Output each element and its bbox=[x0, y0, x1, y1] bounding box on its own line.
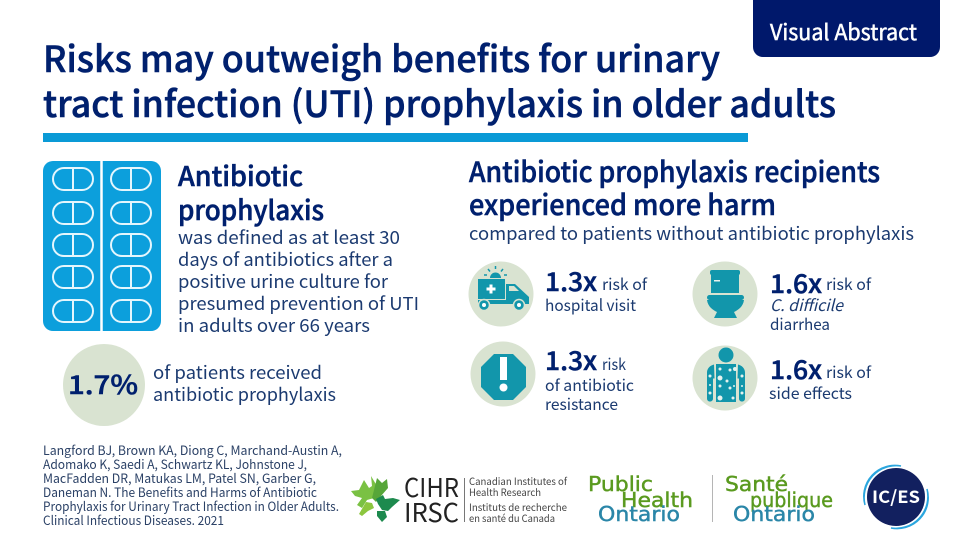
logo: CIHR IRSC: Canadian Institutes of bbox=[469, 473, 568, 488]
badge: Visual Abstract: Visual Abstract bbox=[770, 15, 917, 47]
logo: CIHR IRSC: Instituts de recherche bbox=[469, 499, 567, 514]
logo: IC/ES: IC/ES bbox=[872, 483, 920, 508]
citation text: Prophylaxis for Urinary Tract Infection in Older Adults. bbox=[43, 496, 339, 515]
icon: maple leaf bbox=[351, 476, 400, 522]
logo: CIHR IRSC bbox=[351, 468, 568, 530]
panel: antibiotic prophylaxis definition bbox=[43, 155, 419, 338]
callout: 1.7% of patients bbox=[63, 344, 336, 426]
callout: 1.7% of patients: 1.7% bbox=[68, 365, 138, 402]
logo: Public Health Ontario: Ontario bbox=[598, 502, 680, 526]
logo: CIHR IRSC: en santé du Canada bbox=[469, 510, 555, 525]
heading: antibiotic prophylaxis: prophylaxis bbox=[178, 189, 324, 228]
definition text bbox=[178, 224, 419, 338]
stat: hospital visit: risk of bbox=[602, 271, 648, 295]
stat: hospital visit bbox=[468, 262, 648, 326]
stat: antibiotic resistance: 1.3x bbox=[545, 341, 597, 378]
logo: CIHR IRSC: Health Research bbox=[469, 484, 541, 499]
title: tract infection (UTI) prophylaxis in older adults bbox=[43, 76, 836, 128]
logo: Public Health Ontario: Santé bbox=[725, 472, 788, 496]
stat: hospital visit: 1.3x bbox=[545, 262, 597, 299]
logo: Public Health Ontario: Public bbox=[588, 472, 653, 496]
stat: antibiotic resistance: of antibiotic bbox=[545, 372, 634, 396]
callout: 1.7% of patients: antibiotic prophylaxis bbox=[153, 381, 336, 407]
heading: antibiotic prophylaxis bbox=[178, 155, 324, 228]
title bbox=[43, 31, 836, 128]
icon: warning octagon bbox=[481, 354, 526, 400]
logo: Public Health Ontario: Ontario bbox=[733, 502, 815, 526]
title: Risks may outweigh benefits for urinary bbox=[43, 31, 720, 83]
logo: CIHR IRSC: IRSC bbox=[404, 493, 459, 530]
definition text: days of antibiotics after a bbox=[178, 246, 393, 272]
stat: C. difficile diarrhea: diarrhea bbox=[770, 311, 830, 335]
heading: recipients experienced more harm: Antibiotic prophylaxis recipients bbox=[469, 151, 880, 191]
citation text: Clinical Infectious Diseases. 2021 bbox=[43, 510, 224, 529]
definition text: presumed prevention of UTI bbox=[178, 290, 419, 316]
heading: recipients experienced more harm: compared to patients without antibiotic prophylaxis bbox=[469, 220, 914, 246]
stat: C. difficile diarrhea bbox=[692, 262, 872, 335]
heading: recipients experienced more harm: experienced more harm bbox=[469, 184, 776, 224]
logo: Public Health Ontario: publique bbox=[750, 488, 833, 512]
stat: side effects: 1.6x bbox=[770, 350, 822, 387]
badge: Visual Abstract bbox=[753, 0, 940, 57]
logo: IC/ES bbox=[864, 465, 928, 529]
definition text: was defined as at least 30 bbox=[178, 224, 400, 250]
stat: antibiotic resistance bbox=[470, 341, 634, 415]
title underline bar bbox=[43, 133, 748, 142]
citation text: Daneman N. The Benefits and Harms of Antibiotic bbox=[43, 482, 318, 501]
citation text: MacFadden DR, Matukas LM, Patel SN, Garber G, bbox=[43, 468, 316, 487]
citation text: Adomako K, Saedi A, Schwartz KL, Johnstone J, bbox=[43, 454, 307, 473]
callout: 1.7% of patients: of patients received bbox=[153, 359, 322, 385]
stat: antibiotic resistance: risk bbox=[602, 351, 626, 375]
logo: Public Health Ontario bbox=[588, 472, 833, 526]
icon: ambulance bbox=[478, 266, 529, 310]
stat: side effects: risk of bbox=[826, 359, 872, 383]
definition text: in adults over 66 years bbox=[178, 312, 370, 338]
citation text: Langford BJ, Brown KA, Diong C, Marchand-Austin A, bbox=[43, 440, 342, 459]
citation text bbox=[43, 440, 342, 529]
stat: C. difficile diarrhea: risk of bbox=[826, 271, 872, 295]
stat: side effects: side effects bbox=[769, 380, 852, 404]
icon: blister pack bbox=[43, 161, 161, 331]
heading: antibiotic prophylaxis: Antibiotic bbox=[178, 155, 303, 194]
icon: toilet bbox=[707, 270, 744, 318]
logo: Public Health Ontario: Health bbox=[621, 488, 693, 512]
stat: antibiotic resistance: resistance bbox=[545, 391, 618, 415]
definition text: positive urine culture for bbox=[178, 268, 389, 294]
stat: hospital visit: hospital visit bbox=[545, 292, 636, 316]
heading: recipients experienced more harm bbox=[469, 151, 914, 246]
stat: side effects bbox=[692, 346, 872, 410]
logo: CIHR IRSC: CIHR bbox=[404, 468, 459, 505]
stat: C. difficile diarrhea: 1.6x bbox=[770, 264, 822, 301]
icon: person with rash bbox=[707, 348, 745, 402]
stat: C. difficile diarrhea: C. difficile bbox=[770, 292, 845, 316]
